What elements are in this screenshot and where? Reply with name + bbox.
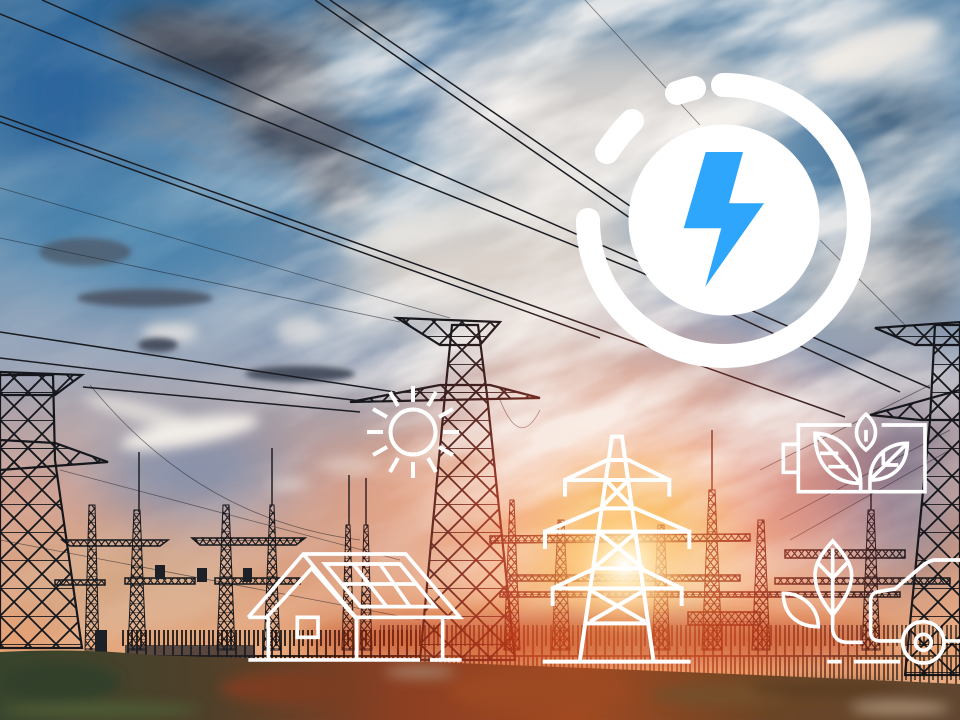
battery body (783, 425, 925, 492)
road dashes (827, 656, 900, 667)
icon: battery with leaves (783, 414, 925, 492)
pylon: left (0, 372, 108, 648)
pylon: centre (350, 318, 540, 660)
background: wispy cloud texture (480, 260, 481, 261)
icon: house with solar roof (248, 554, 462, 660)
background: ground (0, 651, 960, 720)
house outline and roof (248, 554, 460, 617)
ring arc (588, 85, 859, 356)
solar panel (325, 564, 435, 607)
background: red haze over substation (300, 612, 900, 668)
background: small grey clouds (39, 238, 355, 382)
background: dark cloud texture (300, 100, 301, 101)
leaf top (856, 414, 875, 450)
background: large pylons (0, 318, 960, 675)
background: substation equipment along horizon (95, 565, 960, 685)
leaf right (870, 443, 907, 491)
small leaf (783, 593, 818, 627)
background: sun flare (555, 495, 695, 635)
house base line (248, 654, 462, 665)
house walls (268, 617, 443, 660)
icon: sun (367, 386, 459, 478)
car body (871, 560, 960, 641)
pylon: right (870, 322, 960, 675)
background: substation gantries and masts (55, 430, 950, 650)
background: white cloud highlights (80, 7, 948, 491)
icon: power ring with lightning bolt (588, 85, 859, 356)
icon: electric car with plant (783, 541, 960, 663)
leaf left (815, 433, 861, 491)
window (297, 617, 318, 637)
ring dash left (607, 121, 632, 152)
lightning bolt (684, 152, 764, 287)
car wheel (903, 622, 944, 663)
big leaf (815, 541, 863, 642)
white disc (628, 124, 820, 316)
ring dash top (677, 88, 694, 93)
icon: transmission tower (543, 437, 691, 662)
background: dark storm cloud (110, 0, 955, 320)
